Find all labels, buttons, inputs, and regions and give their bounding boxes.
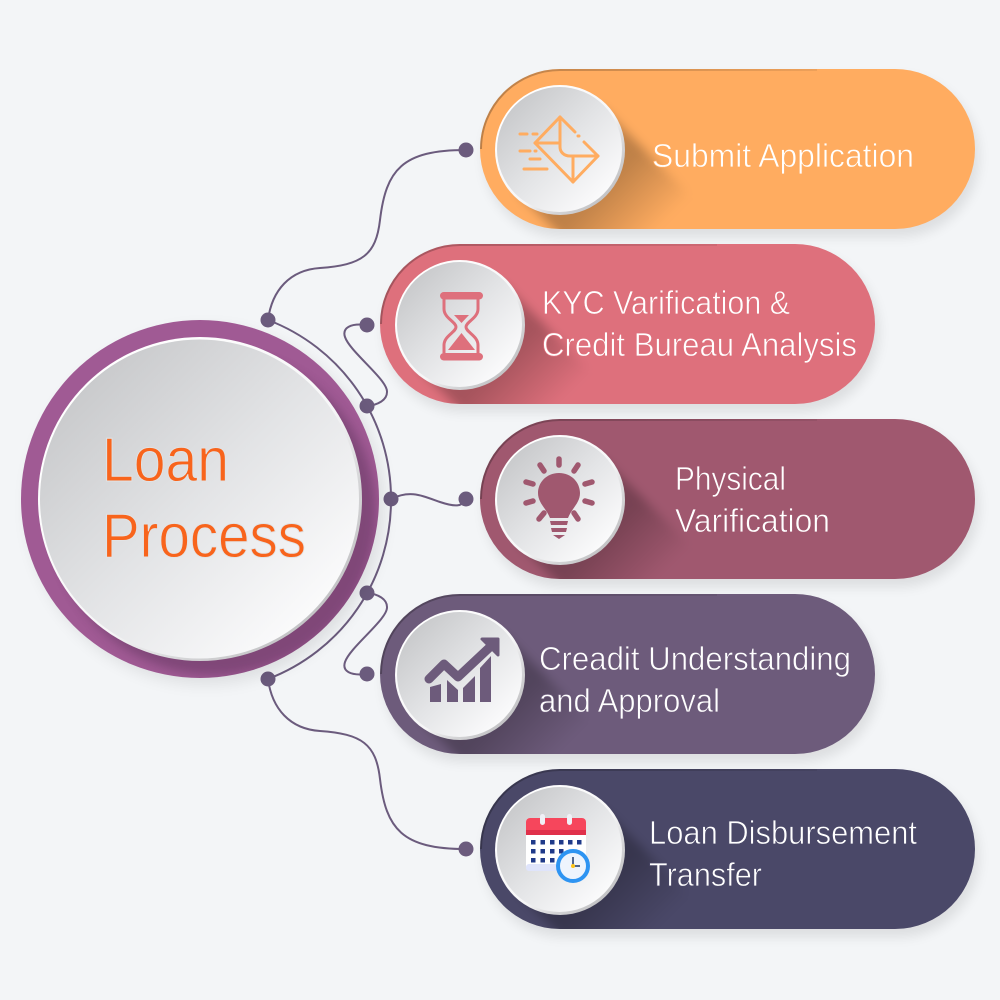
- panel: KYC Varification: [380, 244, 880, 414]
- label: Varification: [675, 502, 830, 539]
- icon: envelope: [520, 117, 598, 182]
- label: Submit Application: [652, 137, 914, 174]
- title: Process: [102, 502, 306, 571]
- label: [539, 640, 851, 719]
- title: [102, 426, 306, 571]
- icon: light bulb: [526, 459, 592, 539]
- label: [649, 814, 917, 893]
- panel: Creadit Understanding: [380, 594, 880, 764]
- label: Loan Disbursement: [649, 814, 917, 851]
- icon: calendar and clock: [526, 814, 588, 881]
- label: Creadit Understanding: [539, 640, 851, 677]
- label: Physical: [675, 460, 786, 497]
- panel: Loan Disbursement Transfer: [480, 769, 980, 939]
- icon: hourglass: [440, 292, 483, 360]
- title: Loan: [102, 426, 229, 495]
- label: KYC Varification &: [542, 284, 790, 321]
- label: [542, 284, 857, 363]
- panel: Physical Varification: [480, 419, 980, 589]
- panel: Loan Process hub: [21, 320, 384, 684]
- panel: Submit Application: [480, 69, 980, 239]
- label: Credit Bureau Analysis: [542, 326, 857, 363]
- label: and Approval: [539, 682, 720, 719]
- connector lines: [268, 150, 466, 849]
- icon: growth chart: [429, 639, 498, 702]
- label: [675, 460, 830, 539]
- connector nodes: [260, 142, 474, 856]
- label: Transfer: [649, 856, 762, 893]
